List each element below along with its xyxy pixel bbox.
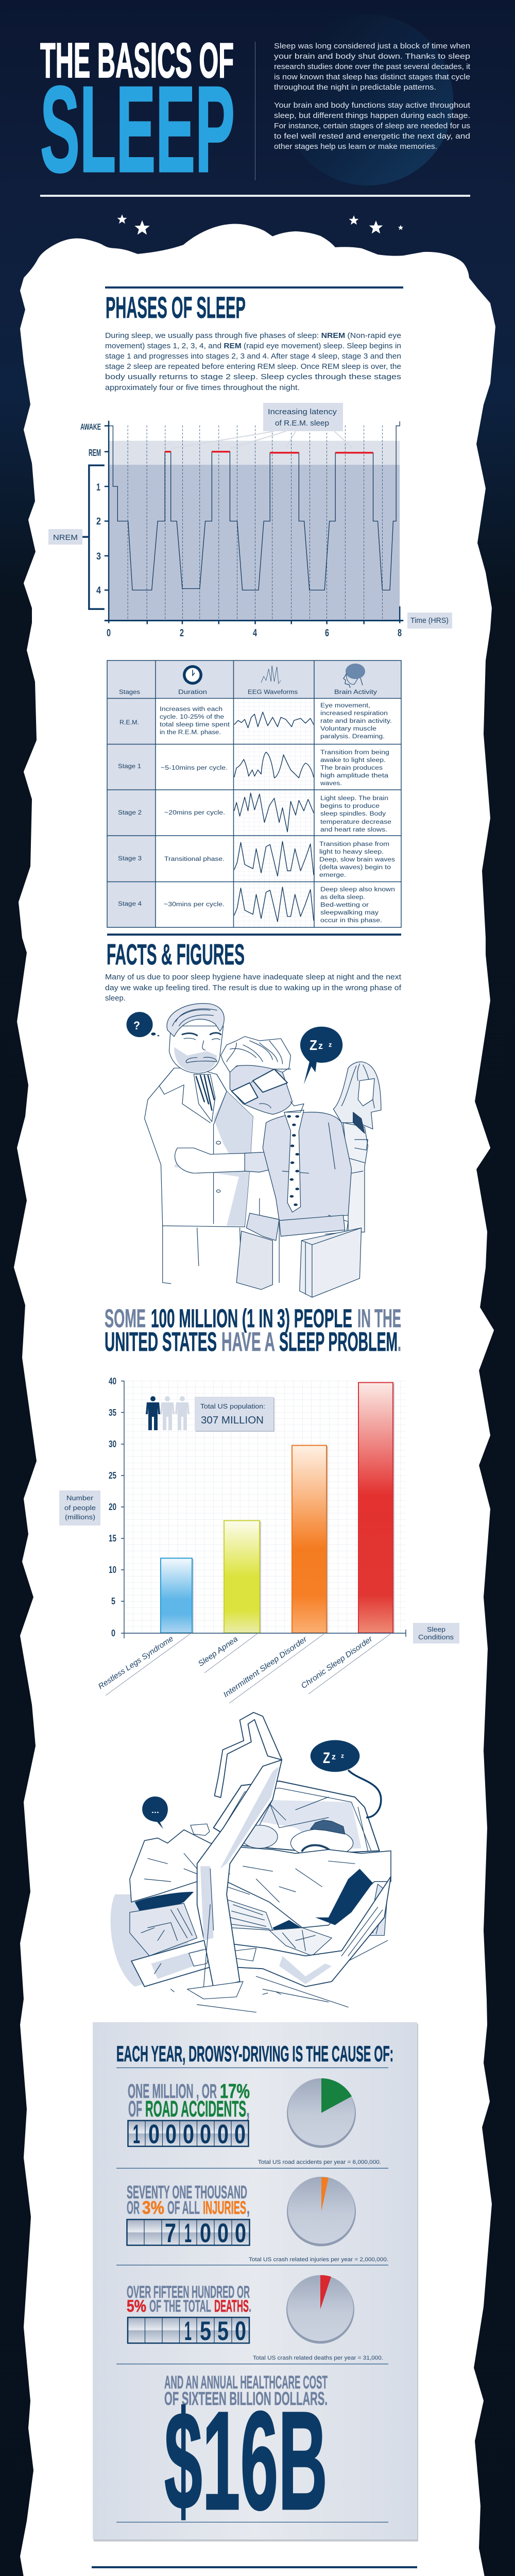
brain activity text: increased respiration — [320, 710, 388, 717]
bar chart: sleep conditions — [97, 1376, 406, 1703]
headline: 100 million: 100 MILLION (1 IN 3) PEOPLE — [151, 1304, 352, 1333]
intro text: sleep, but different things happen during each stage. — [274, 111, 470, 120]
table lines — [107, 660, 401, 927]
icon: one in three people — [146, 1396, 190, 1430]
y axis labels: 35 — [109, 1408, 116, 1418]
brain activity text: sleep spindles. Body — [320, 811, 386, 817]
text: phases intro: approximately four or five times throughout the night. — [105, 383, 300, 392]
brain activity text: Voluntary muscle — [320, 726, 376, 732]
note: deaths total: Total US crash related deaths per year = 31,000. — [253, 2355, 383, 2361]
brain activity text: Light sleep. The brain — [320, 795, 388, 802]
callout: total US population: 307 MILLION — [201, 1415, 264, 1426]
brain activity text: Transition phase from — [319, 841, 389, 848]
briefcases — [236, 1228, 362, 1297]
stat: deaths: 5% — [127, 2297, 146, 2315]
hypnogram chart: 6 — [325, 628, 329, 639]
counter: 1550: 1 — [184, 2316, 192, 2346]
note: injuries total: Total US crash related injuries per year = 2,000,000. — [249, 2257, 388, 2263]
category labels: Sleep Apnea — [197, 1635, 239, 1668]
durations: ~5-10mins per cycle. — [161, 765, 228, 771]
counter: 1000000: 1 — [133, 2120, 140, 2149]
illustration: doctor and sleeping man — [127, 1004, 381, 1297]
category labels: Intermittent Sleep Disorder — [222, 1634, 309, 1699]
label: NREM — [48, 529, 82, 545]
section rule: facts — [107, 934, 401, 936]
text: phases intro: movement) stages 1, 2, 3, 4, and REM (rapid eye movement) sleep. Sleep begins in — [105, 342, 401, 350]
brain activity text: Transition from being — [320, 750, 389, 756]
brain activity text: Deep, slow brain waves — [319, 857, 395, 863]
counter: 1550: 5 — [217, 2316, 229, 2346]
label: number of people — [59, 1490, 100, 1526]
headline: 100 million: SLEEP PROBLEM — [279, 1327, 398, 1357]
label: sleep conditions: Conditions — [418, 1633, 454, 1641]
brain activity text: light to heavy sleep. — [319, 849, 384, 855]
text: . — [398, 1327, 401, 1357]
intro text — [274, 42, 471, 151]
stage names — [118, 720, 142, 907]
stat: road accidents: ONE MILLION , OR — [128, 2080, 217, 2103]
stage names: Stage 1 — [118, 764, 141, 770]
stat: injuries: OF ALL — [167, 2198, 200, 2218]
title: THE BASICS OF — [40, 33, 234, 88]
category labels: Chronic Sleep Disorder — [300, 1634, 374, 1690]
stage names: Stage 4 — [118, 901, 142, 907]
callout: increasing latency: Increasing latency — [268, 408, 337, 416]
illustration: crashed car around a pole — [111, 1713, 391, 2012]
brain activity text: waves. — [320, 781, 342, 787]
stage names: Stage 2 — [118, 810, 142, 816]
counter: 1000000 — [128, 2120, 248, 2149]
label: time hours: Time (HRS) — [410, 616, 449, 625]
counter: 71000 — [127, 2218, 249, 2248]
y axis labels: 20 — [109, 1502, 116, 1512]
counter: 71000: 0 — [217, 2218, 229, 2248]
lamp arm — [214, 1713, 282, 1798]
callout: total US population: Total US population: — [200, 1402, 265, 1410]
counter: 71000: 0 — [235, 2218, 246, 2248]
label: NREM: NREM — [53, 533, 78, 542]
brain activity text: sleepwalking may — [320, 910, 379, 916]
grille and headlights — [130, 1900, 332, 1956]
hypnogram chart: 8 — [398, 628, 402, 639]
intro text: other stages help us learn or make memories. — [274, 142, 437, 151]
brain activity text: (delta waves) begin to — [319, 865, 391, 871]
y axis labels — [109, 1376, 116, 1638]
brain activity text: emerge. — [319, 872, 346, 878]
stages table — [107, 660, 401, 927]
panel: drowsy driving: AND AN ANNUAL HEALTHCARE COST — [164, 2372, 328, 2393]
text: phases intro: During sleep, we usually pass through five phases of sleep: NREM (Non-rapid eye — [105, 331, 401, 340]
bar: sleep apnea — [224, 1521, 260, 1633]
label: time hours — [407, 613, 452, 629]
section rule: phases — [105, 286, 403, 289]
EEG waveforms — [234, 712, 314, 922]
illustration: crashed car around a pole: Z — [323, 1750, 330, 1767]
bubble ellipsis — [142, 1797, 168, 1829]
brain activity text: awake to light sleep. — [320, 757, 386, 764]
counter: 1550: 5 — [200, 2316, 211, 2346]
category labels — [97, 1634, 374, 1699]
text: phases intro: stage 2 sleep are repeated before entering REM sleep. Once REM sleep is over, the — [105, 362, 401, 371]
sleeping man body — [246, 1112, 351, 1282]
label: number of people: of people — [64, 1504, 96, 1512]
stage names: Stage 3 — [118, 856, 142, 862]
counter: 71000: 7 — [165, 2218, 176, 2248]
table headers — [119, 689, 377, 696]
stat: deaths: DEATHS — [214, 2297, 249, 2315]
counter: 71000: 0 — [200, 2218, 211, 2248]
counter: 1000000: 0 — [200, 2120, 211, 2149]
intro text: For instance, certain stages of sleep are needed for us — [274, 122, 470, 130]
callout: total US population — [195, 1397, 274, 1432]
brain activity text: high amplitude theta — [320, 773, 389, 779]
hypnogram chart: AWAKE — [80, 422, 101, 432]
text: phases intro: stage 1 and progresses into stages 2, 3 and 4. After stage 4 sleep, stage 3 and then — [105, 352, 401, 361]
counter: 1000000: 0 — [217, 2120, 229, 2149]
stat: injuries: 3% — [142, 2198, 164, 2218]
category labels: Restless Legs Syndrome — [97, 1634, 175, 1691]
bar: chronic sleep disorder — [358, 1383, 393, 1633]
brain activity text: Deep sleep also known — [320, 887, 395, 893]
text: facts intro: day we wake up feeling tired. The result is due to waking up in the wrong phase of — [105, 984, 402, 992]
durations: Transitional phase. — [164, 856, 225, 862]
counter: 1000000: 0 — [165, 2120, 177, 2149]
doctor tie — [194, 1074, 215, 1122]
headline: 100 million: HAVE A — [221, 1327, 275, 1357]
brain activity text: temperature decrease — [320, 819, 391, 825]
intro text: is now known that sleep has distinct stages that cycle — [274, 73, 470, 81]
hood — [130, 1830, 391, 1928]
polka dot tie — [284, 1110, 304, 1212]
table fills — [107, 660, 401, 927]
brain activity text: paralysis. Dreaming. — [320, 734, 385, 740]
durations: total sleep time spent — [160, 722, 230, 728]
stat: road accidents: , — [246, 2096, 250, 2122]
y axis labels: 5 — [111, 1596, 115, 1606]
pie: 17 percent — [287, 2078, 356, 2148]
header rule — [40, 195, 470, 197]
stage names: R.E.M. — [119, 720, 139, 726]
y axis labels: 10 — [109, 1565, 116, 1575]
illustration: crashed car around a pole: z — [332, 1753, 336, 1761]
pie: 5 percent — [286, 2275, 354, 2344]
durations — [160, 706, 230, 908]
stat: deaths: OF THE TOTAL — [149, 2297, 211, 2315]
counter: 1000000: 0 — [148, 2120, 160, 2149]
durations: in the R.E.M. phase. — [160, 730, 221, 736]
illustration: crashed car around a pole: z — [341, 1752, 344, 1759]
intro text: Sleep was long considered just a block of time when — [274, 42, 470, 50]
label: sleep conditions: Sleep — [427, 1625, 445, 1633]
intro text: throughout the night in predictable patterns. — [274, 83, 436, 92]
pie: 3 percent — [287, 2177, 356, 2246]
section rule: hygiene — [92, 2566, 417, 2568]
healthcare cost text — [164, 2372, 328, 2409]
y axis labels: 0 — [111, 1628, 115, 1638]
intro text: to feel well rested and energetic the next day, and — [274, 132, 470, 141]
stat: injuries: INJURIES — [203, 2198, 246, 2218]
text: phases intro: body usually returns to stage 2 sleep. Sleep cycles through these stages — [105, 372, 401, 381]
hypnogram chart: 0 — [107, 628, 111, 639]
text: facts intro — [105, 973, 402, 1003]
debris — [171, 1941, 388, 2012]
brain activity text: as delta sleep. — [320, 894, 365, 901]
icon: clock — [183, 665, 202, 685]
stat: road accidents: ROAD ACCIDENTS — [145, 2096, 246, 2122]
doctor arm and hand — [175, 1148, 283, 1173]
title — [40, 33, 235, 198]
woman in background — [333, 1062, 381, 1232]
illustration: crashed car around a pole: ... — [151, 1806, 159, 1815]
icon: brain head — [344, 664, 365, 688]
text: phases intro — [105, 331, 401, 392]
headline: 100 million: UNITED STATES — [105, 1327, 217, 1357]
counter: 1000000: 0 — [183, 2120, 194, 2149]
heading: phases of sleep: PHASES OF SLEEP — [106, 291, 246, 325]
brain activity text: rate and brain activity. — [320, 718, 392, 724]
hypnogram chart: 4 — [253, 628, 258, 639]
headline: 100 million: SOME — [105, 1304, 146, 1333]
stat: injuries: SEVENTY ONE THOUSAND — [127, 2182, 247, 2202]
icon: waveform — [261, 666, 281, 684]
hypnogram chart: 1 — [96, 482, 100, 493]
text: facts intro: sleep. — [105, 994, 126, 1003]
note: road accidents total: Total US road accidents per year = 6,000,000. — [258, 2159, 381, 2165]
illustration: doctor and sleeping man: z — [318, 1041, 323, 1051]
counter: 1550 — [128, 2316, 249, 2346]
counter: 1000000: 0 — [234, 2120, 246, 2149]
counter: 1550: 0 — [235, 2316, 246, 2346]
roof and windshield — [191, 1781, 380, 1857]
illustration: doctor and sleeping man: ? — [133, 1019, 140, 1032]
hypnogram chart — [80, 421, 403, 639]
bar: intermittent sleep disorder — [292, 1446, 327, 1633]
pole — [197, 1760, 282, 1988]
y axis labels: 40 — [109, 1376, 116, 1386]
y axis labels: 30 — [109, 1439, 116, 1449]
heading: facts and figures: FACTS & FIGURES — [107, 938, 245, 971]
stat: injuries: , — [247, 2198, 250, 2218]
label: number of people: Number — [66, 1494, 94, 1502]
stat: injuries: OR — [127, 2198, 140, 2218]
panel rules — [116, 2068, 388, 2522]
headline: 100 million — [105, 1304, 401, 1357]
durations: ~20mins per cycle. — [164, 810, 225, 816]
intro text: research studies done over the past several decades, it — [274, 62, 471, 71]
panel: drowsy driving: $16B — [164, 2382, 328, 2539]
stat: road accidents: 17% — [220, 2080, 250, 2103]
brain activity text — [319, 703, 395, 924]
stat: road accidents: OF — [128, 2096, 142, 2122]
panel: drowsy driving — [93, 2022, 418, 2541]
stat: deaths: . — [249, 2297, 251, 2315]
text: facts intro: Many of us due to poor sleep hygiene have inadequate sleep at night and the next — [105, 973, 402, 981]
bar: restless legs syndrome — [161, 1558, 192, 1633]
y axis labels: 25 — [109, 1470, 116, 1481]
stat: road accidents — [128, 2080, 250, 2122]
healthcare cost text: OF SIXTEEN BILLION DOLLARS. — [164, 2388, 328, 2409]
brain activity text: begins to produce — [320, 803, 380, 809]
chart axes — [121, 1381, 406, 1638]
hypnogram chart: 2 — [96, 516, 101, 527]
bubble zzz — [300, 1027, 342, 1084]
durations: ~30mins per cycle. — [164, 902, 225, 908]
doctor coat — [145, 1068, 253, 1227]
bar shadows — [192, 1383, 394, 1633]
label: number of people: (millions) — [65, 1513, 95, 1521]
callout: increasing latency — [263, 403, 343, 431]
brain activity text: occur in this phase. — [320, 918, 382, 924]
hypnogram chart: 3 — [96, 551, 101, 562]
sleeping man head — [221, 1037, 304, 1114]
text: SLEEP — [40, 61, 235, 198]
headline: 100 million: IN THE — [357, 1304, 401, 1333]
brain activity text: Eye movement, — [320, 703, 370, 709]
rear wheel — [368, 1884, 388, 1936]
label: sleep conditions — [413, 1623, 459, 1643]
table headers: Brain Activity — [334, 689, 377, 696]
bubble question — [127, 1012, 159, 1037]
doctor legs — [163, 1224, 242, 1283]
doctor head — [167, 1004, 224, 1073]
bubble zzz — [311, 1740, 381, 1818]
hypnogram chart: REM — [89, 448, 101, 458]
illustration: doctor and sleeping man: z — [329, 1041, 332, 1048]
table headers: Stages — [119, 689, 140, 696]
brain activity text: Bed-wetting or — [320, 902, 369, 908]
front bumper — [131, 1876, 391, 1987]
moon — [282, 14, 453, 185]
stars above cloud — [117, 214, 403, 235]
ground shadow — [111, 1894, 210, 1987]
stat: deaths: OVER FIFTEEN HUNDRED OR — [127, 2282, 250, 2301]
durations: Increases with each — [160, 706, 222, 713]
hypnogram chart: 4 — [96, 585, 101, 596]
table headers: EEG Waveforms — [248, 689, 298, 696]
counter: 71000: 1 — [184, 2218, 192, 2248]
dark engine gaps — [134, 1869, 373, 1936]
stat: injuries — [127, 2182, 250, 2218]
durations: cycle. 10-25% of the — [160, 714, 224, 720]
illustration: doctor and sleeping man: Z — [310, 1037, 317, 1053]
intro text: Your brain and body functions stay active throughout — [274, 101, 471, 110]
brain activity text: The brain produces — [320, 765, 383, 771]
y axis labels: 15 — [109, 1533, 116, 1544]
hypnogram chart: 2 — [180, 628, 184, 639]
table headers: Duration — [178, 689, 207, 696]
callout: increasing latency: of R.E.M. sleep — [275, 419, 329, 428]
intro text: your brain and body shut down. Thanks to sleep — [274, 52, 470, 61]
stat: deaths — [127, 2282, 251, 2315]
category leader lines — [106, 1633, 391, 1703]
brain activity text: and heart rate slows. — [320, 827, 387, 833]
